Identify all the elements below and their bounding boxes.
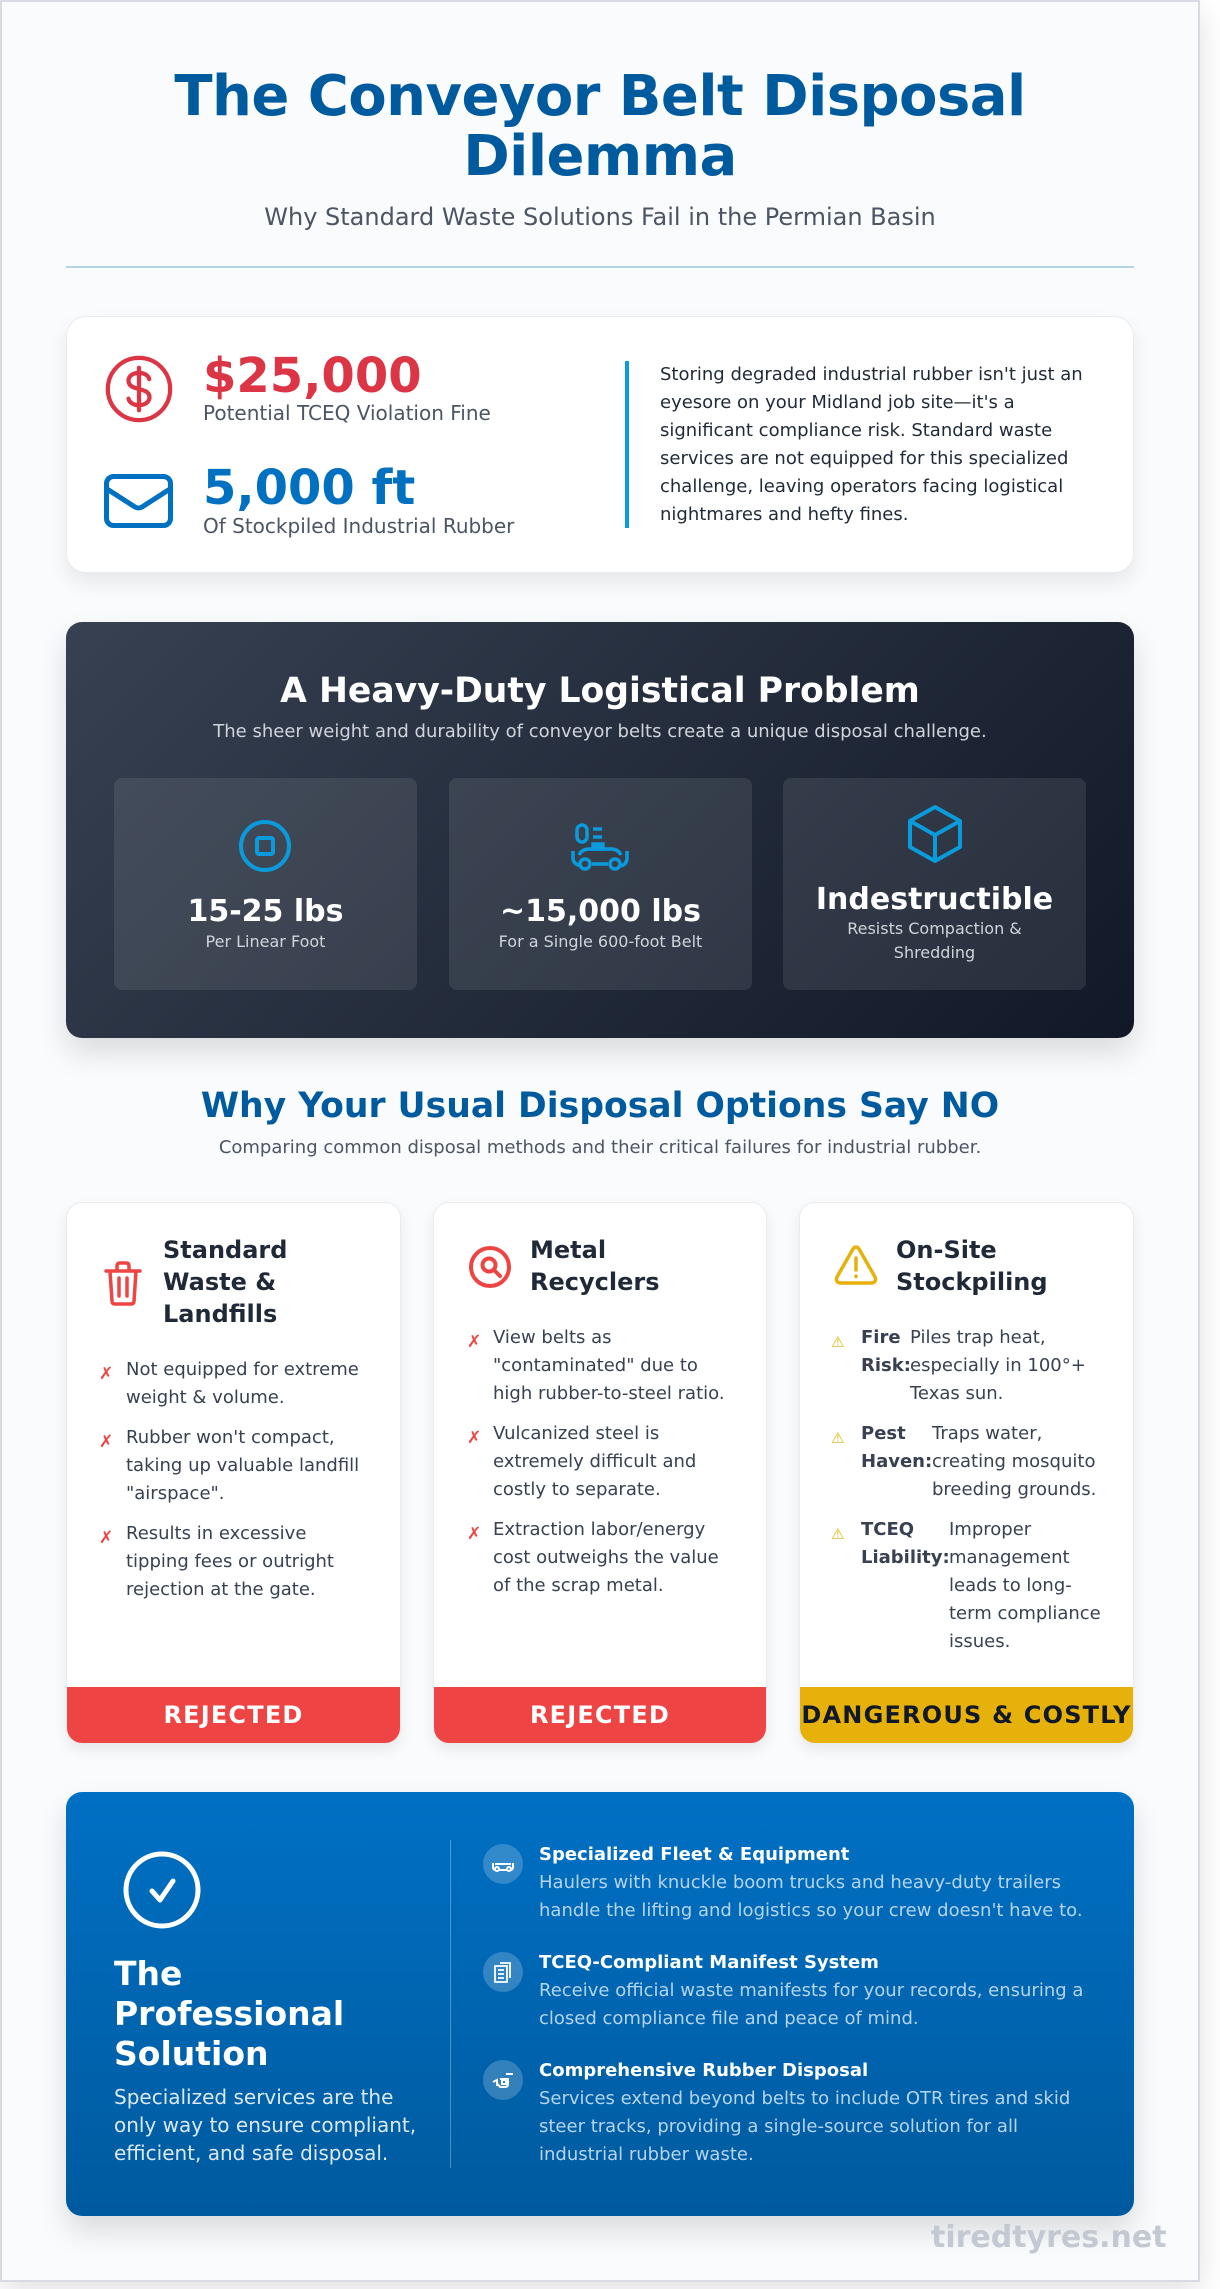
item text: fleet xyxy=(539,1872,1083,1921)
item title: fleet: Specialized Fleet & Equipment xyxy=(539,1844,849,1865)
panel: metal recyclers xyxy=(433,1202,767,1744)
intro paragraph: significant compliance risk. Standard waste xyxy=(660,420,1052,441)
card title: metal recyclers xyxy=(530,1236,659,1296)
bullets: metal recyclers: Extraction labor/energy xyxy=(493,1519,705,1540)
subheading: logistical problem: The sheer weight and durability of conveyor belts create a unique disposal challenge. xyxy=(213,721,987,742)
bullets: metal recyclers: costly to separate. xyxy=(493,1479,661,1500)
bullets: on-site stockpiling: especially in 100°+ xyxy=(910,1355,1086,1376)
card title: on-site stockpiling: Stockpiling xyxy=(896,1268,1048,1296)
header divider xyxy=(66,266,1134,268)
card title: metal recyclers: Metal xyxy=(530,1236,606,1264)
icon: fleet xyxy=(483,1844,523,1884)
stat value: 15-25 lbs: 15-25 lbs xyxy=(187,894,344,929)
bullets: on-site stockpiling: Traps water, xyxy=(932,1423,1042,1444)
status band: rejected xyxy=(67,1687,400,1743)
bullets: standard waste: Results in excessive xyxy=(126,1523,306,1544)
item: comprehensive disposal xyxy=(483,2060,1070,2165)
bullets: standard waste: ✗ xyxy=(99,1528,113,1548)
vertical divider xyxy=(450,1840,451,2168)
panel: key stats xyxy=(66,316,1134,573)
item text: fleet: handle the lifting and logistics so your crew doesn't have to. xyxy=(539,1900,1083,1921)
solution paragraph: efficient, and safe disposal. xyxy=(114,2141,388,2165)
stat note: per foot: Per Linear Foot xyxy=(206,932,325,951)
card title: standard waste: Waste & xyxy=(163,1268,276,1296)
bullets: on-site stockpiling: breeding grounds. xyxy=(932,1479,1096,1500)
bullets: on-site stockpiling: Risk: xyxy=(861,1355,911,1376)
bullets: standard waste: taking up valuable landfill xyxy=(126,1455,359,1476)
bullets: standard waste: rejection at the gate. xyxy=(126,1579,316,1600)
heading: professional solution: Professional xyxy=(114,1994,344,2033)
stat label: fine: Potential TCEQ Violation Fine xyxy=(203,401,491,425)
bullets: on-site stockpiling: Texas sun. xyxy=(910,1383,1003,1404)
bullets: metal recyclers: View belts as xyxy=(493,1327,612,1348)
icon: check circle xyxy=(124,1852,200,1928)
stat card: weight per foot xyxy=(114,778,417,990)
item text: manifest: Receive official waste manifests for your records, ensuring a xyxy=(539,1980,1083,2001)
bullets: on-site stockpiling: ⚠ xyxy=(831,1525,844,1543)
panel: professional solution xyxy=(66,1792,1134,2216)
bullets: standard waste: tipping fees or outright xyxy=(126,1551,334,1572)
item text: comprehensive disposal: steer tracks, providing a single-source solution for all xyxy=(539,2116,1018,2137)
stat note: compaction: Shredding xyxy=(894,943,975,962)
watermark: tiredtyres.net xyxy=(931,2220,1167,2255)
bullets: on-site stockpiling: issues. xyxy=(949,1631,1010,1652)
bullets: standard waste: ✗ xyxy=(99,1432,113,1452)
bullets: on-site stockpiling: Fire xyxy=(861,1327,901,1348)
intro paragraph: Storing degraded industrial rubber isn't just an xyxy=(660,364,1083,385)
intro paragraph: nightmares and hefty fines. xyxy=(660,504,908,525)
icon: trash xyxy=(104,1261,142,1306)
bullets: on-site stockpiling: Haven: xyxy=(861,1451,932,1472)
stat note: belt: For a Single 600-foot Belt xyxy=(499,932,702,951)
bullets: on-site stockpiling: Pest xyxy=(861,1423,906,1444)
bullets: on-site stockpiling: creating mosquito xyxy=(932,1451,1095,1472)
item text: fleet: Haulers with knuckle boom trucks and heavy-duty trailers xyxy=(539,1872,1061,1893)
card title: standard waste: Landfills xyxy=(163,1300,277,1328)
heading: professional solution: Solution xyxy=(114,2034,268,2073)
status band: rejected: REJECTED xyxy=(163,1701,304,1729)
bullets: metal recyclers: "contaminated" due to xyxy=(493,1355,698,1376)
subtitle: Why Standard Waste Solutions Fail in the Permian Basin xyxy=(264,203,936,231)
stat card: belt weight xyxy=(449,778,752,990)
stat card: indestructible xyxy=(783,778,1086,990)
bullets: standard waste: ✗ xyxy=(99,1364,113,1384)
panel: standard waste xyxy=(66,1202,401,1744)
card title: standard waste: Standard xyxy=(163,1236,287,1264)
bullets: on-site stockpiling xyxy=(831,1327,1101,1652)
item title: comprehensive disposal: Comprehensive Rubber Disposal xyxy=(539,2060,868,2081)
item title: manifest: TCEQ-Compliant Manifest System xyxy=(539,1952,879,1973)
stat value: indestructible: Indestructible xyxy=(816,882,1053,917)
item text: comprehensive disposal xyxy=(539,2088,1070,2165)
bullets: standard waste: "airspace". xyxy=(126,1483,225,1504)
status band: rejected: REJECTED xyxy=(530,1701,670,1729)
title: Dilemma xyxy=(463,124,737,189)
status band: rejected xyxy=(434,1687,766,1743)
subheading: comparison: Comparing common disposal methods and their critical failures for industrial rubber. xyxy=(219,1137,981,1158)
icon: truck xyxy=(571,823,629,871)
status band: dangerous xyxy=(800,1687,1133,1743)
title xyxy=(174,64,1026,189)
bullets: on-site stockpiling: Piles trap heat, xyxy=(910,1327,1046,1348)
panel: heavy-duty problem xyxy=(66,622,1134,1038)
stat label: rubber: Of Stockpiled Industrial Rubber xyxy=(203,514,514,538)
card title: on-site stockpiling xyxy=(896,1236,1048,1296)
solution paragraph: Specialized services are the xyxy=(114,2085,393,2109)
bullets: standard waste: weight & volume. xyxy=(126,1387,285,1408)
bullets: standard waste: Not equipped for extreme xyxy=(126,1359,359,1380)
bullets: metal recyclers: cost outweighs the value xyxy=(493,1547,719,1568)
stat value: ~15,000 lbs: ~15,000 lbs xyxy=(500,894,701,929)
stat: 5,000 ft: 5,000 ft xyxy=(203,460,415,516)
bullets: metal recyclers: ✗ xyxy=(467,1332,481,1352)
solution paragraph xyxy=(114,2085,416,2165)
heading: why options say no: Why Your Usual Disposal Options Say NO xyxy=(201,1086,999,1126)
item: fleet xyxy=(483,1844,1083,1921)
bullets: standard waste xyxy=(99,1359,359,1600)
intro paragraph: challenge, leaving operators facing logistical xyxy=(660,476,1063,497)
item: manifest xyxy=(483,1952,1083,2029)
stat note: compaction: Resists Compaction & xyxy=(847,919,1022,938)
icon: recycle xyxy=(483,2060,523,2100)
solution paragraph: only way to ensure compliant, xyxy=(114,2113,416,2137)
bullets: on-site stockpiling: management xyxy=(949,1547,1070,1568)
card title: metal recyclers: Recyclers xyxy=(530,1268,659,1296)
bullets: on-site stockpiling: ⚠ xyxy=(831,1429,844,1447)
stat: $25,000: $25,000 xyxy=(203,348,422,404)
bullets: metal recyclers: ✗ xyxy=(467,1428,481,1448)
bullets: on-site stockpiling: Improper xyxy=(949,1519,1031,1540)
bullets: metal recyclers xyxy=(467,1327,725,1596)
item text: manifest xyxy=(539,1980,1083,2029)
bullets: on-site stockpiling: term compliance xyxy=(949,1603,1101,1624)
accent divider xyxy=(625,361,629,528)
heading: logistical problem: A Heavy-Duty Logistical Problem xyxy=(280,671,920,711)
bullets: standard waste: Rubber won't compact, xyxy=(126,1427,335,1448)
item text: manifest: closed compliance file and peace of mind. xyxy=(539,2008,919,2029)
heading: professional solution: The xyxy=(114,1954,182,1993)
icon: magnifier xyxy=(469,1246,511,1288)
bullets: metal recyclers: Vulcanized steel is xyxy=(493,1423,659,1444)
card title: on-site stockpiling: On-Site xyxy=(896,1236,997,1264)
icon: round weight xyxy=(239,820,291,872)
intro paragraph: eyesore on your Midland job site—it's a xyxy=(660,392,1015,413)
bullets: on-site stockpiling: Liability: xyxy=(861,1547,950,1568)
icon: warning xyxy=(834,1245,878,1285)
bullets: on-site stockpiling: leads to long- xyxy=(949,1575,1072,1596)
icon: dollar xyxy=(106,356,172,422)
title: The Conveyor Belt Disposal xyxy=(174,64,1026,129)
bullets: metal recyclers: of the scrap metal. xyxy=(493,1575,664,1596)
item text: comprehensive disposal: industrial rubber waste. xyxy=(539,2144,754,2165)
bullets: metal recyclers: extremely difficult and xyxy=(493,1451,696,1472)
intro paragraph: services are not equipped for this specialized xyxy=(660,448,1068,469)
heading: professional solution xyxy=(114,1954,344,2073)
bullets: on-site stockpiling: TCEQ xyxy=(861,1519,914,1540)
bullets: on-site stockpiling: ⚠ xyxy=(831,1333,844,1351)
icon: clipboard xyxy=(483,1952,523,1992)
bullets: metal recyclers: high rubber-to-steel ratio. xyxy=(493,1383,725,1404)
icon: envelope xyxy=(104,474,173,528)
card title: standard waste xyxy=(163,1236,287,1328)
item text: comprehensive disposal: Services extend beyond belts to include OTR tires and skid xyxy=(539,2088,1070,2109)
intro paragraph xyxy=(660,364,1083,525)
status band: dangerous: DANGEROUS & COSTLY xyxy=(801,1701,1132,1729)
icon: cube xyxy=(908,805,962,863)
panel: on-site stockpiling xyxy=(799,1202,1134,1744)
bullets: metal recyclers: ✗ xyxy=(467,1524,481,1544)
stat note: compaction xyxy=(847,919,1022,962)
